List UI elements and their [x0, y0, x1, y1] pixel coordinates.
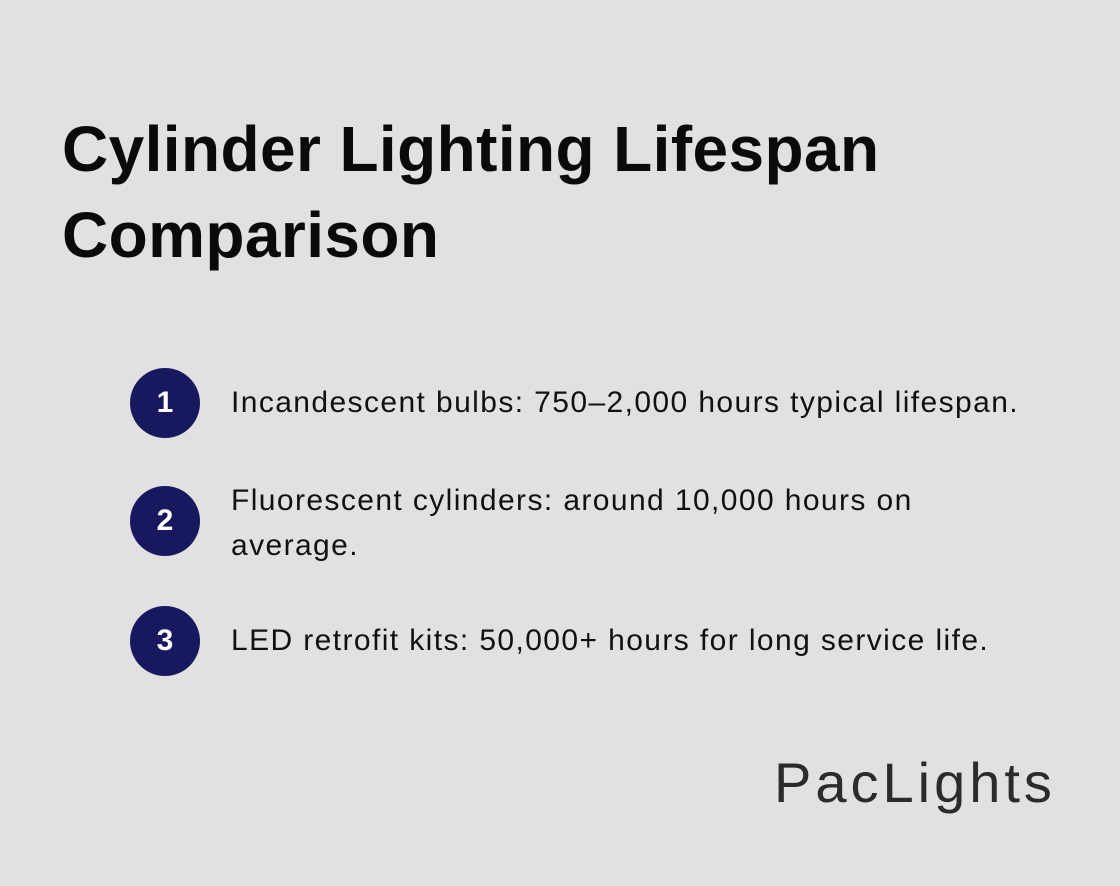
- text 3: LED retrofit kits: 50,000+ hours for long service life.: [231, 624, 989, 657]
- item 3: [130, 606, 989, 676]
- item 1: [130, 368, 1019, 438]
- icon: number 1: 1: [157, 386, 173, 419]
- icon: number 1: [130, 368, 200, 438]
- logo: PacLights: [774, 751, 1056, 814]
- icon: number 3: 3: [157, 624, 173, 657]
- text 2: average.: [231, 529, 359, 562]
- item 2: [130, 484, 913, 562]
- text 1: Incandescent bulbs: 750–2,000 hours typical lifespan.: [231, 386, 1019, 419]
- text 2: Fluorescent cylinders: around 10,000 hours on: [231, 484, 913, 517]
- icon: number 2: [130, 486, 200, 556]
- icon: number 2: 2: [157, 504, 173, 537]
- text 2: [231, 484, 913, 562]
- title: Comparison: [62, 199, 439, 271]
- title: Cylinder Lighting Lifespan: [62, 113, 880, 185]
- title: [62, 113, 880, 271]
- icon: number 3: [130, 606, 200, 676]
